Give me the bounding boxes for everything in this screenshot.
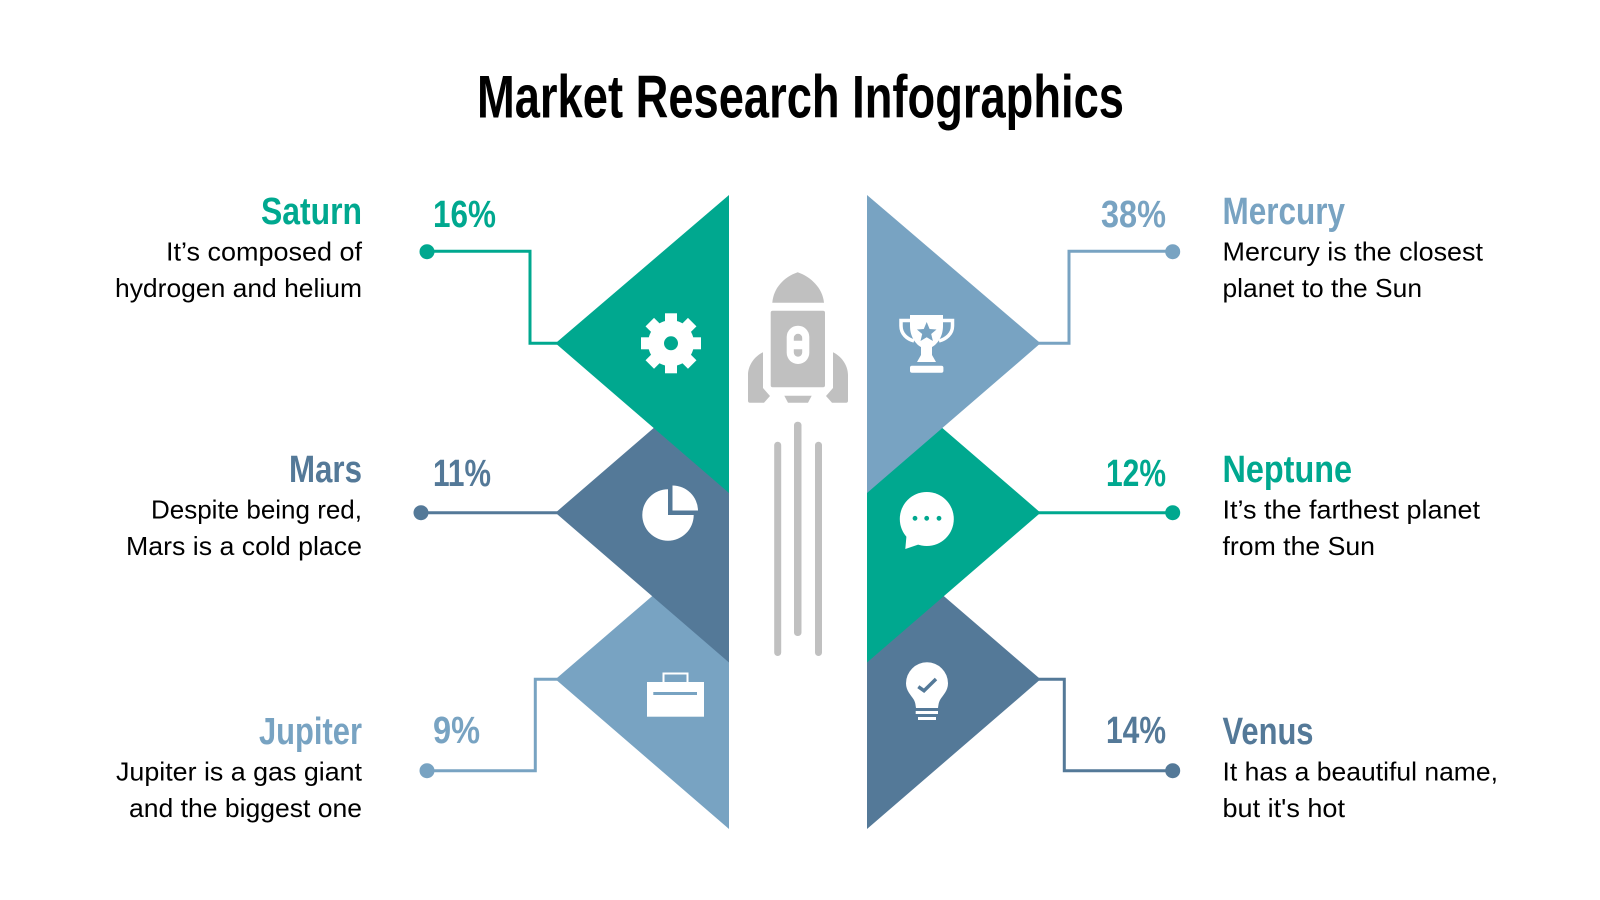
icon: trophy: [901, 315, 952, 373]
triangle: Mars: [556, 363, 729, 662]
text block: Jupiter: and the biggest one: [129, 793, 362, 823]
text block: Venus: [1222, 711, 1498, 823]
icon: speech bubble: [900, 492, 954, 549]
text block: Neptune: from the Sun: [1222, 531, 1375, 561]
connector: Mercury: [1038, 246, 1179, 343]
text block: Saturn: It’s composed of: [166, 236, 363, 266]
triangle: Venus: [867, 530, 1040, 829]
icon: light bulb: [906, 662, 948, 720]
percentage: Saturn 16%: 16%: [433, 194, 496, 236]
text block: Mercury: Mercury: [1222, 191, 1345, 233]
rocket exhaust lines: [774, 422, 822, 656]
title: Market Research Infographics: [477, 64, 1124, 130]
text block: Mercury: [1222, 191, 1484, 303]
triangle: Jupiter: [556, 530, 729, 829]
text block: Neptune: It’s the farthest planet: [1222, 494, 1481, 524]
text block: Jupiter: [116, 711, 363, 823]
text block: Neptune: Neptune: [1222, 449, 1352, 491]
connector: Neptune: [1038, 507, 1179, 519]
percentage: Mercury 38%: 38%: [1101, 194, 1166, 236]
connector: Venus: [1038, 679, 1179, 777]
text block: Jupiter: Jupiter is a gas giant: [116, 756, 363, 786]
text block: Saturn: [115, 191, 363, 303]
text block: Mars: Despite being red,: [151, 494, 362, 524]
percentage: Venus 14%: 14%: [1106, 710, 1166, 752]
text block: Mars: Mars: [289, 449, 362, 491]
text block: Mars: [126, 449, 362, 561]
text block: Saturn: Saturn: [261, 191, 362, 233]
percentage: Mars 11%: 11%: [433, 453, 491, 495]
triangle: Neptune: [867, 363, 1040, 662]
text block: Mars: Mars is a cold place: [126, 531, 362, 561]
percentage: Neptune 12%: 12%: [1106, 453, 1166, 495]
icon: rocket: [748, 272, 848, 403]
text block: Venus: Venus: [1222, 711, 1314, 753]
text block: Jupiter: Jupiter: [259, 711, 362, 753]
text block: Venus: but it's hot: [1222, 793, 1346, 823]
connector: Mars: [415, 507, 558, 519]
connector: Jupiter: [421, 679, 558, 777]
connector: Saturn: [421, 246, 558, 343]
text block: Mercury: Mercury is the closest: [1222, 236, 1484, 266]
icon: briefcase: [647, 674, 704, 717]
icon: pie chart: [642, 486, 698, 541]
triangle: Saturn: [556, 195, 729, 493]
text block: Saturn: hydrogen and helium: [115, 273, 362, 303]
text block: Venus: It has a beautiful name,: [1222, 756, 1498, 786]
icon: gear: [641, 313, 701, 373]
text block: Mercury: planet to the Sun: [1222, 273, 1422, 303]
triangle: Mercury: [867, 195, 1040, 493]
text block: Neptune: [1222, 449, 1481, 561]
percentage: Jupiter 9%: 9%: [433, 710, 480, 752]
